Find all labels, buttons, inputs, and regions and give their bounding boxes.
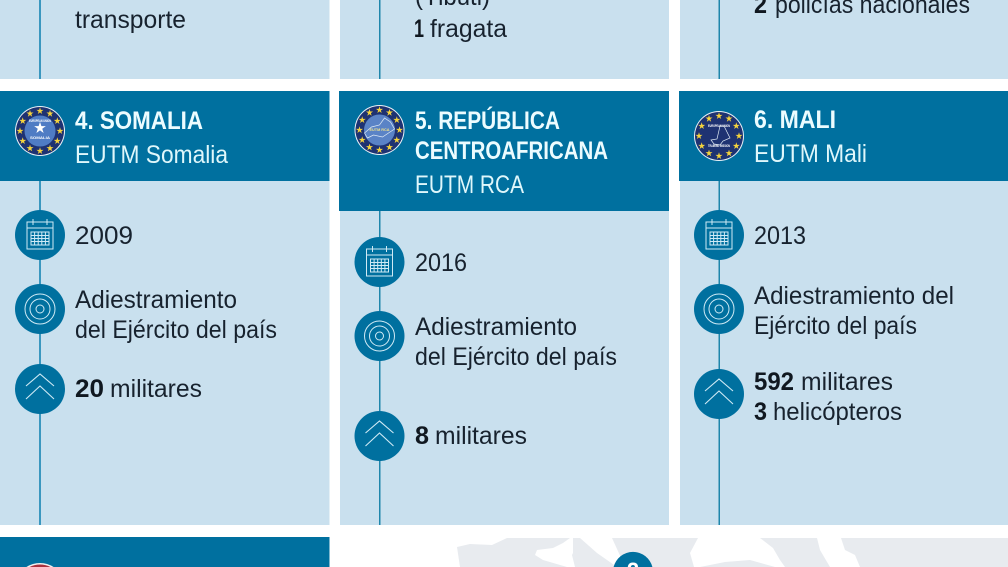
subheading: EUTM RCA: EUTM RCA: [415, 171, 524, 199]
text: objective: [415, 313, 617, 371]
panel: 4. Somalia: [0, 91, 330, 525]
text: 1 fragata: fragata: [430, 15, 507, 43]
text: resources: helicópteros: [773, 398, 902, 426]
icon: chevrons: [694, 369, 744, 419]
icon: calendar: [694, 210, 744, 260]
header: Mali: [679, 91, 1008, 181]
text: 8 militares: 8: [415, 422, 429, 450]
text: year 2009: 2009: [75, 222, 133, 250]
icon: target: [15, 284, 65, 334]
header: next mission, cropped: [0, 537, 330, 567]
text: 1 fragata: 1: [414, 15, 424, 43]
text: transporte: transporte: [75, 6, 186, 34]
text: resources: [754, 368, 902, 426]
map marker: 2: [614, 552, 652, 567]
text: year 2013: 2013: [754, 222, 806, 250]
badge: EUTM Mali: [694, 111, 744, 161]
text: objective: del Ejército del país: [75, 316, 277, 344]
text: objective: [75, 286, 277, 344]
text: objective: Adiestramiento del: [754, 282, 954, 310]
badge: red, cropped: [26, 563, 54, 567]
badge: EUTM Mali: EUROPEAN UNION: [708, 124, 730, 128]
text: resources: militares: [801, 368, 893, 396]
heading: 4. Somalia: 4. SOMALIA: [75, 107, 203, 135]
text: objective: [754, 282, 954, 340]
text: objective: Ejército del país: [754, 312, 917, 340]
header: República Centroafricana: [339, 91, 669, 211]
heading: 5. República Centroafricana: [415, 105, 608, 165]
icon: calendar: [15, 210, 65, 260]
text: 8 militares: militares: [435, 422, 527, 450]
badge: EUTM Somalia: SOMALIA: [30, 136, 50, 140]
heading: 5. República Centroafricana: 5. REPÚBLICA: [415, 105, 560, 135]
icon: target: [354, 311, 404, 361]
text: objective: del Ejército del país: [415, 343, 617, 371]
text: 20 militares: 20: [75, 375, 104, 403]
map: background, cropped: [457, 538, 1008, 567]
badge: EUTM Somalia: EUROPEAN UNION: [29, 119, 51, 123]
heading: 6. Mali: 6. MALI: [754, 106, 836, 134]
header: Somalia: [0, 91, 330, 181]
panel: 5. República Centroafricana: [339, 91, 669, 525]
icon: target: [694, 284, 744, 334]
badge: EUTM Mali: TRAINING MISSION: [708, 144, 730, 148]
panel: top row, column 3: [680, 0, 1008, 79]
icon: chevrons: [354, 411, 404, 461]
panel: top row, column 1: [0, 0, 330, 79]
text: objective: Adiestramiento: [75, 286, 237, 314]
text: objective: Adiestramiento: [415, 313, 577, 341]
icon: calendar: [354, 237, 404, 287]
subheading: EUTM Somalia: EUTM Somalia: [75, 141, 228, 169]
text: 20 militares: militares: [110, 375, 202, 403]
icon: chevrons: [15, 364, 65, 414]
badge: EUTM RCA: [354, 105, 404, 155]
panel: 6. Mali: [679, 91, 1008, 525]
panel: top row, column 2: [340, 0, 669, 79]
subheading: EUTM Mali: EUTM Mali: [754, 140, 867, 168]
badge: EUTM RCA: EUTM RCA: [370, 128, 390, 132]
text: year 2016: 2016: [415, 249, 467, 277]
heading: 5. República Centroafricana: CENTROAFRICANA: [415, 137, 608, 165]
text: resources: 3: [754, 398, 767, 426]
text: resources: 592: [754, 368, 794, 396]
badge: EUTM Somalia: [15, 106, 65, 156]
